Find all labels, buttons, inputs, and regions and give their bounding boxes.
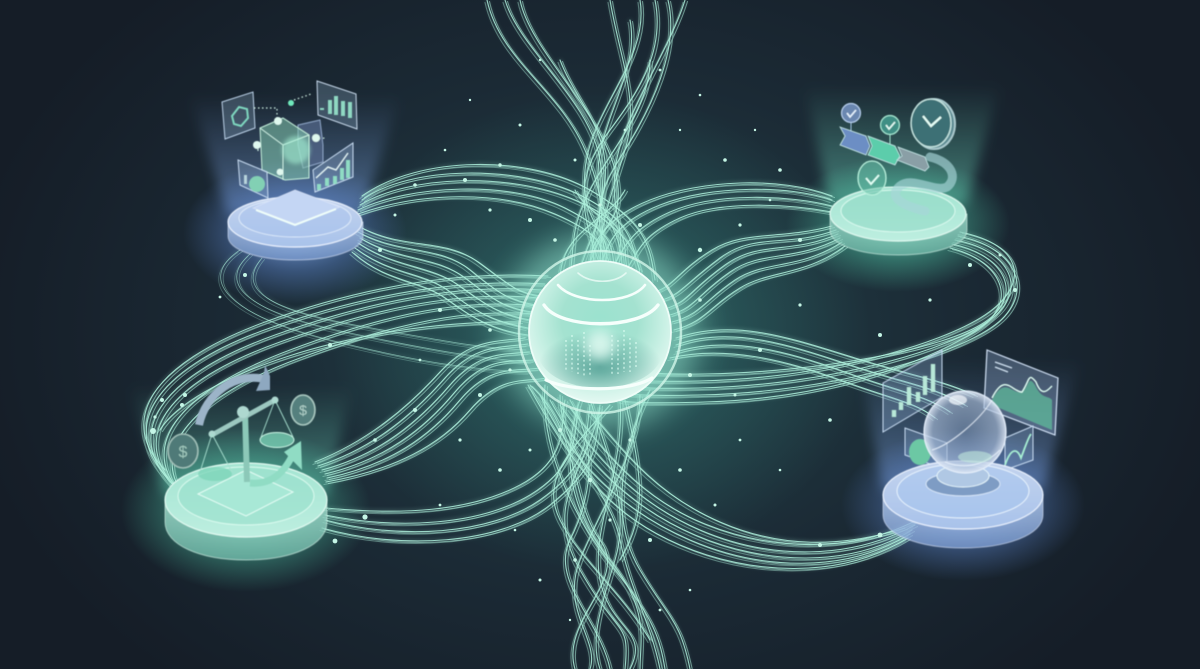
pie chart panel <box>238 160 268 198</box>
crystal ball <box>924 391 1006 473</box>
strands: top-right platform to sphere <box>655 226 845 330</box>
bar chart panel <box>317 81 357 129</box>
strands: top-right arc over to the centre <box>590 183 832 272</box>
sphere: body <box>529 261 671 403</box>
more parallel fibres for density <box>142 2 1015 669</box>
platform glow halos <box>121 156 1085 592</box>
flowing fibre strands <box>144 0 1017 669</box>
platform base <box>165 463 327 560</box>
sphere: outer halo <box>502 234 698 430</box>
platform: top right with timeline <box>830 99 967 255</box>
sphere: lower shaded data region <box>538 316 662 388</box>
strands: right ring around the top-right platform <box>605 232 1017 403</box>
dark cube <box>298 120 323 168</box>
floating particles <box>150 59 1017 621</box>
timeline pin 1 <box>842 104 860 136</box>
strands: lower right of bottom-left platform <box>322 400 600 541</box>
curved path arrow <box>895 157 952 211</box>
coin right <box>291 395 315 425</box>
strands: bottom-right platform to centre <box>528 385 917 569</box>
light beam: top right <box>805 85 1000 205</box>
strands: bottom vertical bundle <box>530 385 690 669</box>
sphere: data columns <box>566 330 636 376</box>
soft bloom over strands <box>144 0 1017 669</box>
link nodes <box>253 100 320 175</box>
chart panel right <box>984 350 1058 435</box>
strands: sphere to bottom-right panels <box>670 330 975 418</box>
platform: top left with data dashboards <box>222 81 363 260</box>
strands: top-left arc over to the centre <box>358 164 655 280</box>
growth chart panel <box>313 143 353 192</box>
coin right: $ <box>299 402 307 418</box>
sphere: glass shell <box>519 251 681 413</box>
platform base <box>830 187 967 255</box>
clock <box>911 99 955 149</box>
curved arrow <box>199 365 270 425</box>
platform: bottom left with scales <box>165 365 327 560</box>
light beam: bottom left <box>130 385 352 495</box>
up arrow <box>250 441 302 483</box>
dotted links <box>254 94 325 175</box>
light beam: top left <box>190 95 400 215</box>
check badge <box>858 161 886 195</box>
glass cube <box>260 118 310 180</box>
coin left <box>168 434 198 468</box>
orb stand <box>926 465 1000 496</box>
balance scales <box>198 396 294 482</box>
central glow <box>330 92 870 572</box>
timeline pin 2 <box>880 116 900 146</box>
extra parallel fibres for density <box>146 2 1020 669</box>
chart panel left <box>883 350 942 432</box>
strands: thin loop below the top-left platform <box>221 250 530 372</box>
timeline chevrons <box>840 127 929 171</box>
platform base <box>228 190 363 260</box>
central sphere <box>502 234 698 430</box>
platform base <box>883 461 1043 548</box>
platform: bottom right with crystal ball <box>883 350 1058 548</box>
light beam: bottom right <box>860 360 1080 490</box>
coin left: $ <box>179 444 188 461</box>
network panel <box>222 92 255 139</box>
strands: top vertical bundle <box>487 0 685 280</box>
sphere: glowing latitude bands <box>544 273 658 389</box>
sphere: core glow <box>585 330 615 360</box>
strands: large left loop <box>144 275 548 498</box>
strands: bottom-left platform to sphere <box>315 338 548 482</box>
chart panel behind ball <box>905 426 1033 470</box>
strands: top-left platform to sphere <box>352 228 540 335</box>
